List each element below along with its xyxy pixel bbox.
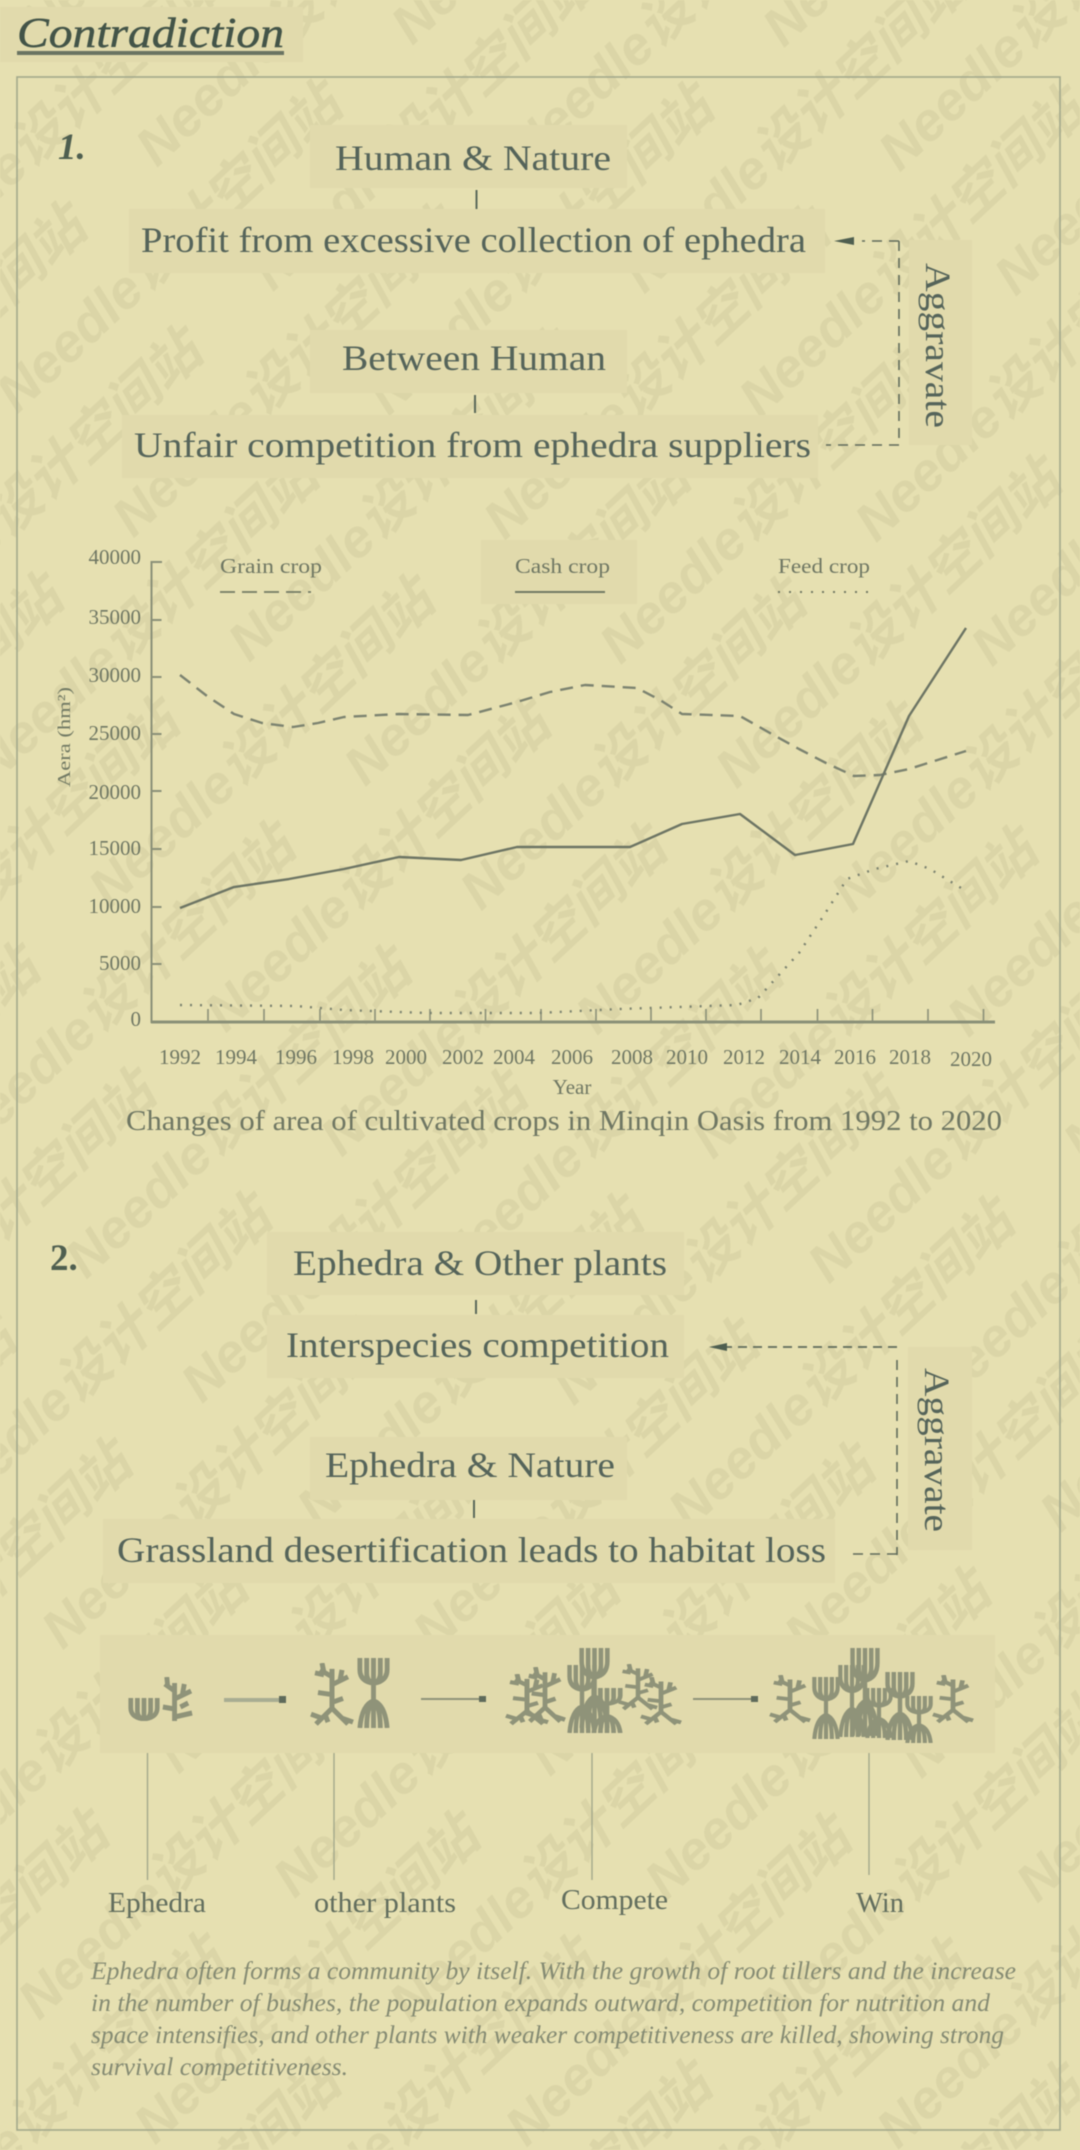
arrow 1	[224, 1696, 286, 1703]
y axis labels: 0	[130, 1007, 141, 1031]
x axis labels: 2002	[442, 1045, 484, 1069]
title: Contradiction	[17, 11, 284, 57]
y axis title: Aera (hm²)	[54, 687, 75, 787]
box: Ephedra and Other plants: Ephedra & Other plants	[293, 1243, 667, 1283]
text block: explanation: Ephedra often forms a community by itself. With the growth of root tillers and the increase	[90, 1958, 1016, 1985]
arrow 2	[421, 1696, 486, 1702]
icon: stage 1 ephedra and other plant	[131, 1677, 192, 1721]
box: Profit: Profit from excessive collection of ephedra	[141, 220, 806, 260]
section 1 number: 1.	[58, 127, 86, 168]
box: Interspecies competition: Interspecies competition	[286, 1325, 669, 1365]
legend highlight	[481, 540, 637, 604]
diagram: ephedra contradiction	[103, 1232, 972, 1583]
legend: Feed crop	[778, 554, 870, 578]
x axis labels: 1994	[215, 1045, 258, 1069]
box: Unfair competition: Unfair competition from ephedra suppliers	[134, 425, 811, 465]
label: Compete: Compete	[561, 1884, 668, 1916]
box: Human and Nature	[310, 125, 627, 188]
y axis labels: 35000	[88, 605, 141, 629]
label: Aggravate: Aggravate	[917, 1368, 957, 1532]
arrow: aggravate loop	[826, 237, 899, 445]
series: cash crop	[180, 628, 966, 908]
leader lines	[148, 1753, 869, 1880]
y axis labels: 40000	[88, 545, 141, 569]
series: grain crop	[180, 675, 966, 776]
legend	[220, 554, 870, 592]
label: Win: Win	[856, 1887, 904, 1919]
box: Unfair competition	[122, 415, 818, 478]
x axis labels: 1992	[159, 1045, 201, 1069]
icon: stage 3 competing plants	[506, 1648, 681, 1733]
stage band	[100, 1635, 995, 1753]
box: Grassland desertification	[103, 1519, 835, 1583]
y axis labels: 20000	[88, 780, 141, 804]
section 2 number: 2.	[50, 1238, 78, 1279]
y axis labels: 30000	[88, 663, 141, 687]
legend: Cash crop	[515, 554, 610, 578]
y axis labels	[88, 545, 141, 1031]
y axis labels: 10000	[88, 894, 141, 918]
chart caption: Changes of area of cultivated crops in Minqin Oasis from 1992 to 2020	[126, 1105, 1002, 1137]
label: Aggravate	[909, 240, 972, 445]
box: Between Human: Between Human	[342, 338, 606, 378]
line chart: cultivated crop area	[54, 540, 1002, 1137]
text block: explanation: space intensifies, and other plants with weaker competitiveness are killed, showing strong	[91, 2022, 1004, 2049]
panel: plant competition stages	[100, 1635, 995, 1919]
series: feed crop	[180, 861, 966, 1013]
box: Ephedra and Nature: Ephedra & Nature	[325, 1445, 615, 1485]
x axis labels: 2016	[834, 1045, 876, 1069]
label: Aggravate	[908, 1347, 972, 1550]
y axis labels: 5000	[99, 951, 141, 975]
x axis labels: 2018	[889, 1045, 931, 1069]
x axis labels: 1996	[275, 1045, 317, 1069]
x axis labels: 2008	[611, 1045, 653, 1069]
box: Human and Nature: Human & Nature	[335, 138, 611, 178]
title	[0, 7, 303, 62]
box: Grassland desertification: Grassland desertification leads to habitat loss	[117, 1530, 826, 1570]
box: Between Human	[310, 330, 627, 393]
arrow 3	[693, 1696, 758, 1702]
text block: explanation: in the number of bushes, the population expands outward, competition for nutrition and	[91, 1990, 991, 2017]
label: Aggravate: Aggravate	[918, 263, 958, 428]
label: other plants: other plants	[314, 1887, 456, 1919]
x axis labels: 2004	[493, 1045, 536, 1069]
x axis labels: 2000	[385, 1045, 427, 1069]
x axis labels: 1998	[332, 1045, 374, 1069]
text block: explanation: survival competitiveness.	[91, 2054, 348, 2081]
axes	[151, 562, 995, 1023]
arrow: aggravate loop	[709, 1343, 897, 1555]
icon: stage 4 ephedra wins	[770, 1648, 973, 1743]
x axis labels: 2006	[551, 1045, 593, 1069]
y axis labels: 25000	[88, 721, 141, 745]
y axis labels: 15000	[88, 836, 141, 860]
diagram: human contradiction	[122, 125, 972, 478]
x axis labels: 2014	[779, 1045, 822, 1069]
box: Ephedra and Other plants	[267, 1232, 684, 1295]
legend: Grain crop	[220, 554, 322, 578]
x axis labels: Year	[553, 1075, 591, 1099]
box: Ephedra and Nature	[310, 1437, 627, 1500]
x axis labels: 2012	[723, 1045, 765, 1069]
x axis labels	[159, 1045, 992, 1099]
box: Profit	[129, 209, 825, 273]
x axis labels: 2020	[950, 1047, 992, 1071]
x axis labels: 2010	[666, 1045, 708, 1069]
label: Ephedra: Ephedra	[108, 1887, 206, 1919]
box: Interspecies competition	[267, 1315, 684, 1378]
icon: stage 2 two plants	[311, 1658, 387, 1728]
text block: explanation	[90, 1958, 1016, 2081]
